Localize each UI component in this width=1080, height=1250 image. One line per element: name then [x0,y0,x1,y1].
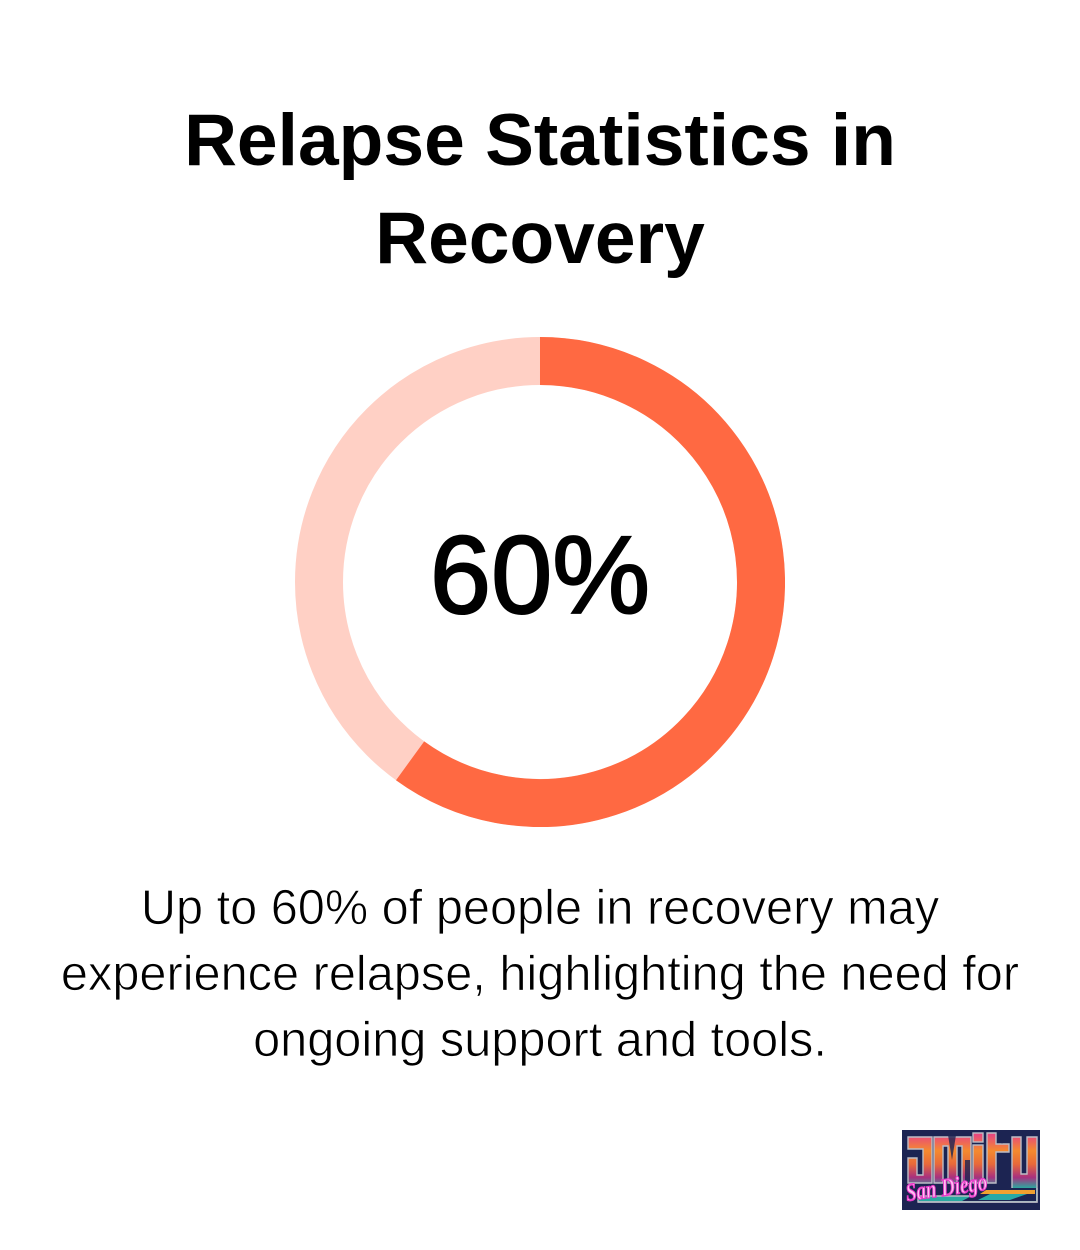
description: Up to 60% of people in recovery may [141,881,939,935]
donut chart [295,337,785,827]
title: Recovery [375,197,705,279]
donut value: 60% [430,514,650,637]
logo script: San Diego [904,1169,989,1207]
description: ongoing support and tools. [253,1013,827,1067]
description [61,881,1019,1067]
logo: Amity San Diego [902,1130,1040,1210]
title: Relapse Statistics in [184,99,896,181]
title [184,99,896,279]
description: experience relapse, highlighting the need for [61,947,1019,1001]
